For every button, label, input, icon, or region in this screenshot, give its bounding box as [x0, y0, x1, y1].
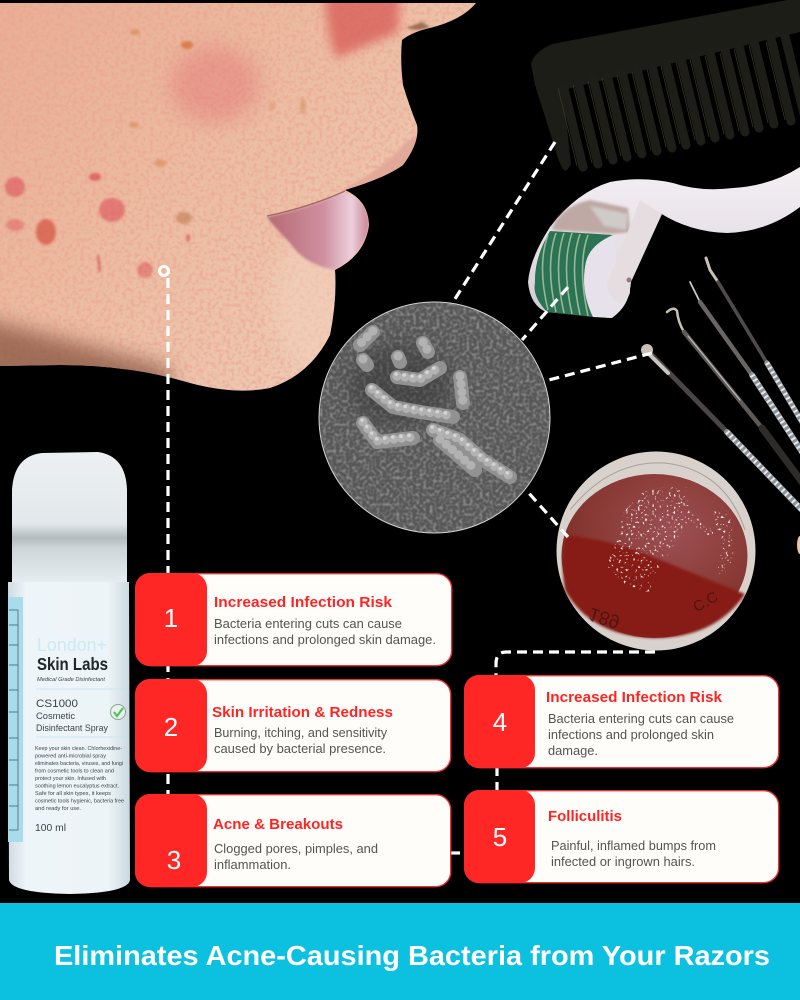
product description: Keep your skin clean. Chlorhexidine-: [35, 746, 122, 752]
product description: and ready for use.: [35, 806, 81, 812]
card 4: [464, 675, 779, 768]
connector: card 3 to card 5: [450, 851, 466, 855]
banner headline: Eliminates Acne-Causing Bacteria from Your Razors: [54, 940, 770, 971]
tool: ball loop: [641, 344, 800, 510]
card 1 text: Bacteria entering cuts can cause: [214, 617, 402, 631]
extraction tools: [641, 258, 800, 510]
card 1 title: Increased Infection Risk: [214, 595, 393, 611]
bottle body: [8, 582, 130, 894]
tool: hook: [667, 309, 800, 482]
product description: eliminates bacteria, viruses, and fungi: [35, 761, 123, 767]
card 5 text: infected or ingrown hairs.: [551, 855, 695, 869]
upper lip: [345, 135, 418, 190]
number 3: 3: [167, 845, 181, 875]
number block 4: [464, 675, 535, 768]
number 4: 4: [493, 707, 507, 737]
card 3 text: [214, 842, 378, 872]
connector: tool to micrograph: [545, 353, 652, 381]
card 2 text: Burning, itching, and sensitivity: [214, 726, 388, 740]
roller window: [552, 200, 630, 234]
roller arm: [607, 200, 662, 303]
number block 1: [135, 573, 207, 666]
number 5: 5: [493, 822, 507, 852]
drum end cap: [584, 235, 630, 318]
card 4 title: Increased Infection Risk: [546, 690, 723, 706]
tagline: Medical Grade Disinfectant: [37, 677, 106, 683]
number 2: 2: [164, 712, 178, 742]
roller handle and head: [528, 167, 800, 318]
product description: soothing lemon eucalyptus extract.: [35, 784, 119, 790]
derma roller: [528, 167, 800, 318]
comb: [531, 0, 800, 171]
connector: roller to micrograph: [522, 287, 568, 340]
badge: check mark: [110, 704, 126, 720]
lower lip: [267, 192, 369, 270]
card 5 text: Painful, inflamed bumps from: [551, 839, 716, 853]
product description: protect your skin. Infused with: [35, 776, 106, 782]
green needle drum: [534, 231, 613, 317]
card 4 text: Bacteria entering cuts can cause: [548, 712, 734, 726]
number block 2: [135, 679, 207, 772]
product name: CS1000: [36, 698, 78, 710]
connector: face to cards: [160, 266, 168, 800]
side panel: [8, 597, 23, 842]
number 1: 1: [164, 603, 178, 633]
card 4 text: damage.: [548, 744, 598, 758]
product name: [36, 698, 108, 734]
product description: cosmetic tools hygienic, bacteria free: [35, 798, 124, 804]
dish marking: C.C: [690, 588, 721, 616]
dish marking: 189: [586, 603, 623, 632]
card 4 text: [548, 712, 734, 758]
bottle cap: [12, 452, 127, 582]
product name: Cosmetic: [36, 711, 75, 722]
footer banner: [0, 903, 800, 1000]
card 1 text: infections and prolonged skin damage.: [214, 633, 436, 647]
volume: 100 ml: [35, 822, 66, 834]
card 2 text: caused by bacterial presence.: [214, 742, 386, 756]
colonies: [608, 487, 735, 595]
tool: needle: [690, 282, 800, 452]
connector: petri dish to micrograph: [527, 491, 568, 537]
number block 3: [135, 794, 207, 887]
bacteria clusters: [360, 331, 510, 477]
small cropped object at right edge: [797, 536, 800, 554]
product description: from cosmetic tools to clean and: [35, 768, 114, 774]
agar lower half: [563, 535, 745, 638]
petri dish: [556, 452, 756, 650]
tool: fork: [706, 258, 800, 422]
bacteria micrograph circle: [319, 302, 550, 533]
connector: petri dish to card 4: [496, 652, 655, 680]
brand: London+: London+: [37, 635, 107, 655]
card 3: [135, 794, 451, 887]
card 3 text: inflammation.: [214, 858, 291, 872]
product description: Safe for all skin types, it keeps: [35, 791, 111, 797]
card 1 text: [214, 617, 436, 647]
card 5: [464, 790, 779, 883]
connector: card 4 to card 5: [495, 766, 499, 792]
acne spots: [5, 29, 306, 278]
photo: face with acne: [0, 0, 480, 410]
card 4 text: infections and prolonged skin: [548, 728, 714, 742]
number block 5: [464, 790, 535, 883]
product description: powered anti-microbial spray: [35, 754, 106, 760]
product: spray bottle: [8, 452, 130, 894]
card 5 text: [551, 839, 716, 869]
brand: Skin Labs: Skin Labs: [37, 654, 108, 674]
card 5 title: Folliculitis: [548, 809, 622, 825]
card 3 title: Acne & Breakouts: [213, 817, 343, 833]
product name: Disinfectant Spray: [36, 723, 108, 734]
card 2: [135, 679, 451, 772]
connector: comb to micrograph: [453, 142, 555, 302]
card 3 text: Clogged pores, pimples, and: [214, 842, 378, 856]
card 1: [135, 573, 452, 666]
card 2 text: [214, 726, 388, 756]
product description: [35, 746, 124, 812]
card 2 title: Skin Irritation & Redness: [212, 705, 393, 721]
